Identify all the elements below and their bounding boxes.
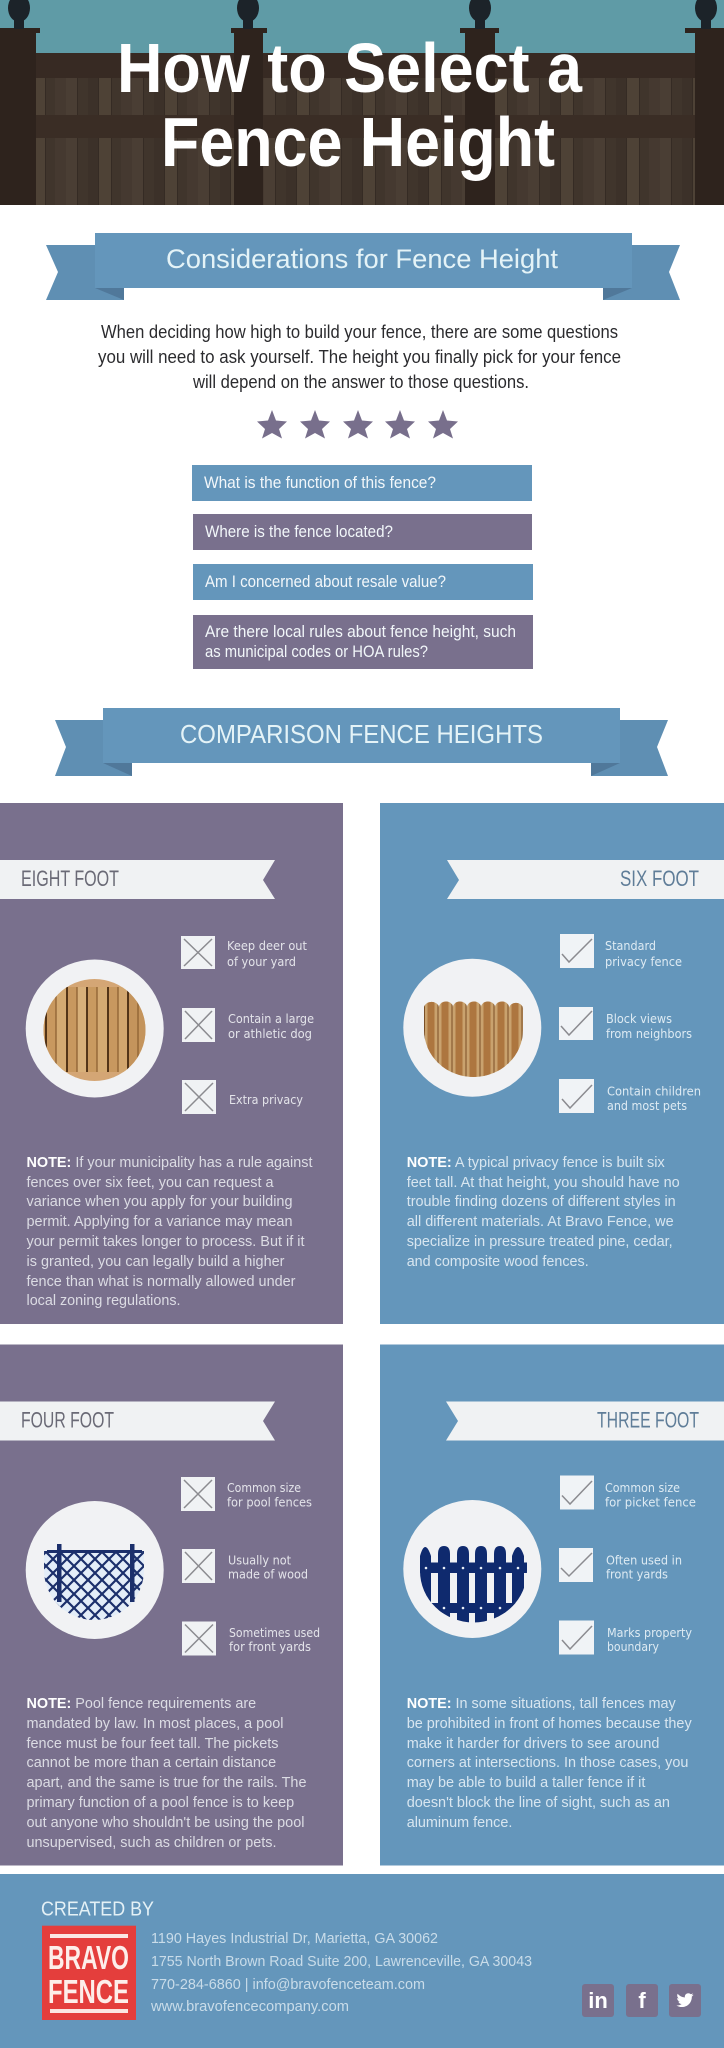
check item: picket fence size: for picket fence: [605, 1496, 696, 1510]
note: eight foot: NOTE: If your municipality has a rule against: [26, 1154, 313, 1171]
note: four foot: primary function of a pool fence is to keep: [26, 1794, 294, 1811]
note: eight foot: fences over six feet, you can request a: [26, 1174, 274, 1191]
note: eight foot: is granted, you can legally build a higher: [26, 1253, 285, 1270]
note: six foot: feet tall. At that height, you should have no: [407, 1174, 680, 1191]
check item: front yards: Often used in: [606, 1554, 682, 1568]
note: four foot: apart, and the same is true for the rails. The: [26, 1774, 306, 1791]
x item: pool fences: Common size: [227, 1481, 301, 1495]
note: eight foot: fence than what is normally allowed under: [26, 1273, 296, 1290]
note: four foot: fence must be four feet tall. The pickets: [26, 1735, 278, 1752]
contact details: 1190 Hayes Industrial Dr, Marietta, GA 30062: [151, 1930, 438, 1947]
panel: four foot: [0, 1344, 343, 1866]
check item: standard privacy: [560, 934, 682, 969]
x item: extra privacy: Extra privacy: [229, 1093, 303, 1107]
x item: not wood: Usually not: [228, 1554, 291, 1568]
title: How to Select a: [117, 29, 583, 107]
icon: facebook: [626, 1984, 658, 2017]
icon: linkedin: [582, 1984, 614, 2017]
note: three foot: corners at intersections. In those cases, you: [407, 1754, 688, 1771]
banner: six foot: [447, 860, 724, 899]
panel: six foot: [380, 803, 724, 1324]
check item: standard privacy: privacy fence: [605, 955, 682, 969]
note: four foot: out anyone who shouldn't be using the pool: [26, 1814, 304, 1831]
note: three foot: NOTE: In some situations, tall fences may: [407, 1695, 676, 1712]
check item: standard privacy: Standard: [605, 939, 656, 953]
banner: six foot: SIX FOOT: [620, 866, 699, 891]
ribbon heading: comparison: [55, 708, 668, 776]
banner: three foot: [446, 1402, 724, 1440]
check item: property boundary: [559, 1620, 692, 1654]
intro paragraph: you will need to ask yourself. The height you finally pick for your fence: [98, 347, 621, 367]
note: four foot: cannot be more than a certain distance: [26, 1754, 276, 1771]
note: four foot: unsupervised, such as children or pets.: [26, 1834, 276, 1851]
check item: block views: from neighbors: [606, 1027, 692, 1041]
question: resale: [193, 564, 533, 600]
x item: large dog: [182, 1008, 314, 1042]
banner: eight foot: EIGHT FOOT: [21, 866, 119, 891]
check item: front yards: front yards: [606, 1568, 668, 1582]
x item: keep deer: of your yard: [227, 955, 296, 969]
question: local rules: [193, 615, 533, 669]
question: local rules: as municipal codes or HOA rules?: [205, 643, 428, 661]
note: eight foot: variance when you apply for your building: [26, 1193, 292, 1210]
title: [117, 29, 583, 181]
icon: privacy fence: [403, 959, 541, 1097]
check item: property boundary: Marks property: [607, 1626, 692, 1640]
note: four foot: mandated by law. In most places, a pool: [26, 1715, 284, 1732]
ribbon heading: considerations: [46, 233, 680, 300]
note: eight foot: [26, 1154, 313, 1309]
contact details: 1755 North Brown Road Suite 200, Lawrenceville, GA 30043: [151, 1953, 532, 1970]
intro paragraph: [98, 322, 621, 392]
x item: pool fences: for pool fences: [227, 1496, 312, 1510]
stars: [257, 410, 458, 438]
note: three foot: [407, 1695, 692, 1831]
x item: extra privacy: [182, 1080, 303, 1114]
banner: eight foot: [0, 860, 275, 899]
contact details: [150, 1930, 532, 2015]
note: six foot: trouble finding dozens of different styles in: [407, 1193, 676, 1210]
question: location: [193, 514, 532, 550]
x item: keep deer: [181, 936, 307, 969]
fence panels: [0, 53, 724, 205]
note: eight foot: your permit takes longer to process. But if it: [26, 1233, 305, 1250]
ribbon heading: considerations: Considerations for Fence Height: [166, 244, 559, 274]
note: four foot: [26, 1695, 306, 1851]
icon: linkedin: in: [588, 1988, 608, 2013]
note: six foot: all different materials. At Bravo Fence, we: [407, 1213, 674, 1230]
check item: contain children: [559, 1079, 701, 1113]
panel: three foot: [380, 1344, 724, 1866]
note: six foot: NOTE: A typical privacy fence is built six: [407, 1154, 665, 1171]
question: function: [192, 465, 532, 501]
note: six foot: specialize in pressure treated pine, cedar,: [407, 1233, 673, 1250]
note: four foot: NOTE: Pool fence requirements are: [26, 1695, 256, 1712]
logo: bravo fence: [42, 1926, 136, 2020]
check item: picket fence size: [560, 1476, 696, 1510]
contact details: www.bravofencecompany.com: [150, 1998, 349, 2015]
x item: pool fences: [181, 1477, 312, 1511]
hero banner: [0, 0, 724, 205]
check item: block views: [559, 1007, 692, 1041]
check item: contain children: Contain children: [607, 1084, 701, 1098]
contact details: 770-284-6860 | info@bravofenceteam.com: [151, 1976, 425, 1993]
note: three foot: aluminum fence.: [407, 1814, 512, 1831]
note: three foot: make it harder for drivers to see around: [407, 1735, 659, 1752]
icon: wood fence: [26, 960, 164, 1098]
x item: large dog: or athletic dog: [228, 1027, 312, 1041]
question: location: Where is the fence located?: [205, 523, 393, 541]
intro paragraph: When deciding how high to build your fence, there are some questions: [101, 322, 618, 342]
x item: front yards: [182, 1622, 320, 1656]
panel: eight foot: [0, 803, 343, 1324]
x item: front yards: Sometimes used: [229, 1626, 320, 1640]
note: six foot: [407, 1154, 680, 1270]
note: eight foot: local zoning regulations.: [26, 1292, 180, 1309]
question: function: What is the function of this fence?: [204, 474, 436, 492]
intro paragraph: will depend on the answer to those questions.: [192, 372, 529, 392]
check item: contain children: and most pets: [607, 1099, 687, 1113]
note: eight foot: permit. Applying for a variance may mean: [26, 1213, 292, 1230]
note: three foot: doesn't block the line of sight, such as an: [407, 1794, 670, 1811]
check item: picket fence size: Common size: [605, 1481, 680, 1495]
x item: not wood: made of wood: [228, 1568, 308, 1582]
title: Fence Height: [161, 103, 555, 181]
post finials: [8, 0, 717, 29]
x item: not wood: [182, 1549, 308, 1583]
logo: bravo fence: BRAVO: [48, 1939, 129, 1976]
icon: facebook: f: [638, 1988, 646, 2013]
banner: four foot: FOUR FOOT: [21, 1408, 114, 1432]
check item: front yards: [559, 1548, 682, 1582]
check item: block views: Block views: [606, 1012, 672, 1026]
banner: four foot: [0, 1402, 275, 1440]
ribbon heading: comparison: COMPARISON FENCE HEIGHTS: [180, 719, 543, 749]
icon: twitter: [669, 1984, 701, 2017]
note: three foot: be prohibited in front of homes because they: [407, 1715, 692, 1732]
footer: [0, 1874, 724, 2048]
icon: picket fence: [403, 1500, 541, 1638]
x item: front yards: for front yards: [229, 1640, 311, 1654]
question: local rules: Are there local rules about fence height, such: [205, 623, 516, 641]
note: three foot: may be able to build a taller fence if it: [407, 1774, 646, 1791]
created by label: CREATED BY: [41, 1899, 154, 1921]
fence posts: [0, 28, 724, 205]
question: resale: Am I concerned about resale value?: [205, 573, 446, 591]
x item: keep deer: Keep deer out: [227, 939, 307, 953]
icon: chain link fence: [26, 1501, 164, 1639]
check item: property boundary: boundary: [607, 1640, 659, 1654]
x item: large dog: Contain a large: [228, 1012, 314, 1026]
note: six foot: and composite wood fences.: [407, 1253, 589, 1270]
logo: bravo fence: FENCE: [48, 1973, 129, 2010]
